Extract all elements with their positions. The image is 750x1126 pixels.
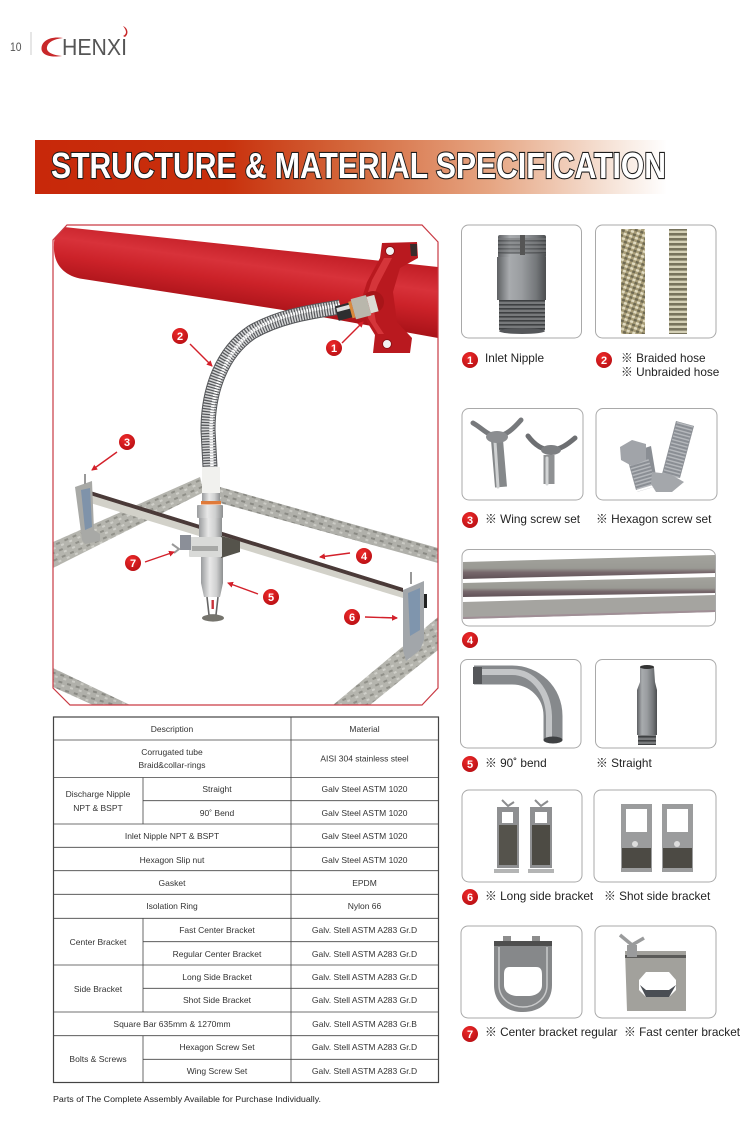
callout numbers: 7 [130,558,136,570]
label 4 [462,632,478,648]
material table [54,717,438,1082]
material table: Corrugated tube [141,747,203,757]
panel: regular center bracket [461,926,582,1018]
material table: Inlet Nipple NPT & BSPT [125,831,219,841]
title banner [35,140,667,194]
corrugated hose [208,305,340,467]
label 1 [462,351,544,368]
panel: fast center bracket [595,926,716,1018]
material table: Galv. Stell ASTM A283 Gr.D [312,949,417,959]
left side bracket [75,474,100,544]
panel: 90 degree bend nipple [460,660,581,748]
arrows [92,322,397,618]
material table: Galv. Stell ASTM A283 Gr.D [312,1066,417,1076]
material table: Galv Steel ASTM 1020 [322,808,408,818]
label 4: 4 [467,635,474,647]
label 6: ※ Long side bracket [485,889,594,903]
sprinkler drop assembly [197,467,224,622]
panel: inlet nipple [462,225,582,338]
material table: Square Bar 635mm & 1270mm [113,1019,231,1029]
label 5: ※ 90˚ bend [485,756,547,770]
panel: hexagon screws [596,408,717,500]
red main pipe [54,227,438,338]
material table: Braid&collar-rings [138,760,206,770]
material table: Center Bracket [70,937,127,947]
label straight: ※ Straight [596,756,652,770]
label short side bracket: ※ Shot side bracket [604,889,711,903]
panel: wing screws [462,408,583,500]
callout numbers: 4 [361,551,368,563]
logo: Chenxi [31,26,127,60]
material table: Galv. Stell ASTM A283 Gr.D [312,972,417,982]
page number: 10 [10,40,22,54]
material table: 90˚ Bend [200,808,235,818]
material table: Galv. Stell ASTM A283 Gr.B [312,1019,417,1029]
callout numbers: 6 [349,612,355,624]
material table: Material [349,724,380,734]
inlet fitting [334,294,379,321]
label 5: 5 [467,759,473,771]
material table: Galv Steel ASTM 1020 [322,831,408,841]
frame border [53,225,438,705]
material table: Straight [202,784,232,794]
panel: straight nipple [596,660,716,748]
panel: assembly illustration [53,225,438,705]
label hexagon screw set: ※ Hexagon screw set [596,512,712,526]
right side bracket [403,572,427,661]
callout numbers: 3 [124,437,130,449]
label 1: 1 [467,355,473,367]
material table: Galv. Stell ASTM A283 Gr.D [312,995,417,1005]
center bracket [172,535,240,558]
material table: Galv Steel ASTM 1020 [322,855,408,865]
label 2: ※ Unbraided hose [621,365,720,379]
material table: Discharge Nipple [66,789,131,799]
label fast center bracket: ※ Fast center bracket [624,1025,741,1039]
callout numbers: 2 [177,331,183,343]
material table: Hexagon Slip nut [140,855,205,865]
label 2 [596,351,720,379]
ceiling rail: left [53,477,204,568]
material table: Wing Screw Set [187,1066,248,1076]
panel: hoses [596,225,716,338]
material table: Description [151,724,194,734]
ceiling rail: bottom right [333,617,438,705]
material table: Bolts & Screws [69,1054,127,1064]
logo: Chenxi: HENXI [62,34,127,60]
label 7: ※ Center bracket regular [485,1025,618,1039]
material table: Shot Side Bracket [183,995,252,1005]
label 3: 3 [467,515,473,527]
label 6: 6 [467,892,473,904]
material table: Galv. Stell ASTM A283 Gr.D [312,925,417,935]
callout numbers: 1 [331,343,337,355]
material table: Isolation Ring [146,901,198,911]
square bar [87,490,403,598]
label 3: ※ Wing screw set [485,512,581,526]
material table: Galv. Stell ASTM A283 Gr.D [312,1042,417,1052]
material table: Long Side Bracket [182,972,252,982]
footnote: Parts of The Complete Assembly Available for Purchase Individually. [53,1095,321,1104]
material table: Gasket [159,878,186,888]
material table: Nylon 66 [348,901,382,911]
label 1: Inlet Nipple [485,351,544,365]
panel: long side brackets [462,790,582,882]
material table: AISI 304 stainless steel [320,754,409,764]
label 2: 2 [601,355,607,367]
material table: NPT & BSPT [73,803,123,813]
panel: short side brackets [594,790,716,882]
label 2: ※ Braided hose [621,351,706,365]
panel: square bars [462,550,716,626]
ceiling rail: back right [220,487,438,563]
material table: Regular Center Bracket [173,949,262,959]
pipe coupling [362,242,418,353]
callout numbers [119,328,372,625]
material table: EPDM [352,878,377,888]
material table: Galv Steel ASTM 1020 [322,784,408,794]
material table: Fast Center Bracket [179,925,255,935]
ceiling rail: bottom left [53,668,130,705]
label 5 [462,756,547,772]
callout numbers: 5 [268,592,274,604]
label 7: 7 [467,1029,473,1041]
material table: Side Bracket [74,984,123,994]
material table: Hexagon Screw Set [179,1042,255,1052]
